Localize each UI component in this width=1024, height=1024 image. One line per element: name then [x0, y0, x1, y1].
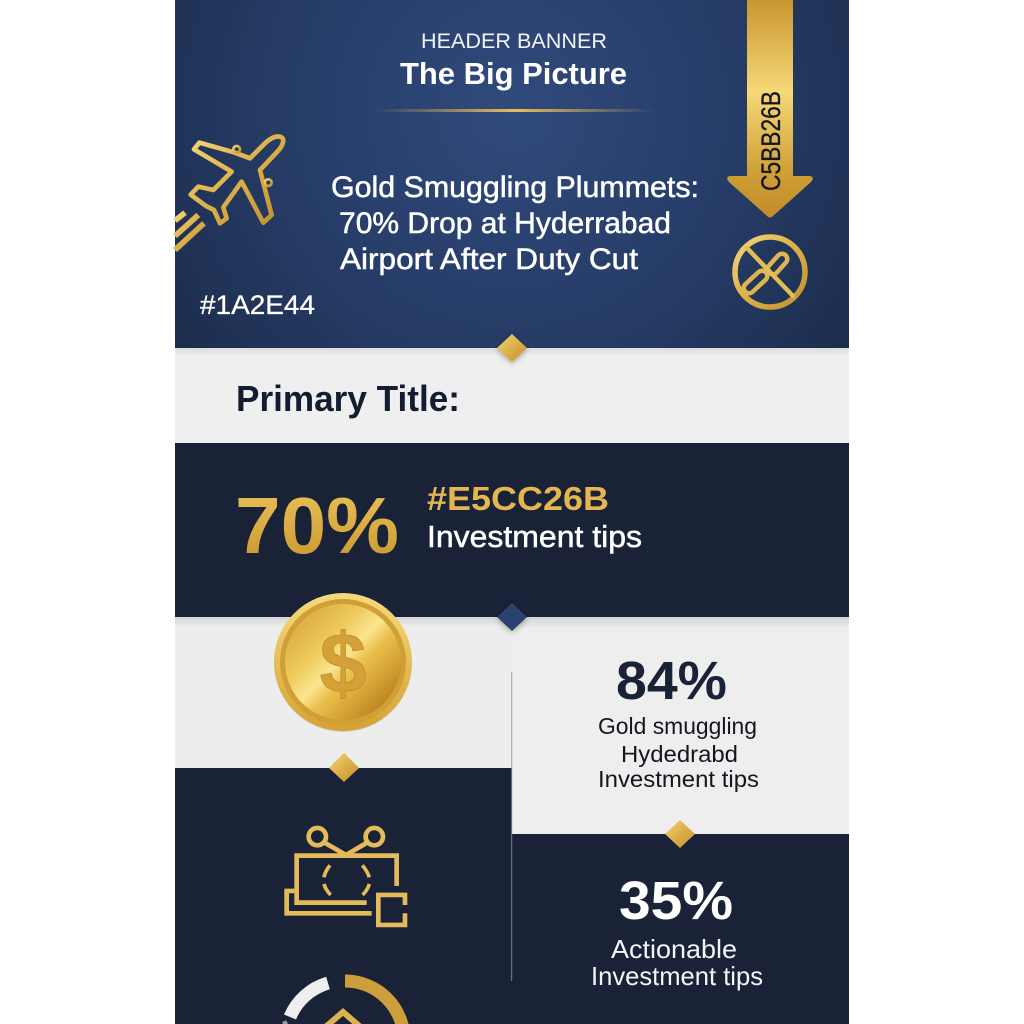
caption line 3: Investment tips — [598, 766, 759, 792]
icon: gold dollar coin — [274, 593, 412, 732]
panel: light left — [175, 617, 512, 768]
headline line 3: Airport After Duty Cut — [340, 243, 638, 276]
arrow: gold down arrow — [727, 0, 813, 218]
icon: money bill with scissors — [287, 828, 405, 925]
icon: airplane — [175, 136, 283, 250]
dollar sign: $ — [320, 616, 366, 710]
panel: 84% statistic — [512, 617, 849, 834]
caption line 2: Hydedrabd — [621, 741, 738, 767]
panel: header banner — [175, 0, 849, 348]
headline line 2: 70% Drop at Hyderrabad — [339, 207, 671, 240]
panel: 35% statistic — [512, 834, 849, 1024]
diamond: header connector — [497, 334, 527, 362]
headline — [331, 171, 699, 276]
caption line 1: Actionable — [611, 934, 737, 964]
header label: HEADER BANNER — [421, 30, 607, 53]
gold rule — [375, 109, 655, 112]
arrow label: C5BB26B — [756, 91, 786, 191]
diamond: left connector — [329, 753, 359, 782]
colour label navy: #1A2E44 — [200, 290, 315, 320]
headline line 1: Gold Smuggling Plummets: — [331, 171, 699, 204]
stat value 84%: 84% — [616, 651, 727, 711]
primary title: Primary Title: — [236, 378, 460, 419]
caption line 2: Investment tips — [591, 961, 763, 991]
panel: navy left — [175, 768, 512, 1024]
colour label gold: #E5CC26B — [427, 480, 609, 517]
diamond: navy connector — [497, 603, 527, 631]
stat caption: Investment tips — [427, 519, 642, 554]
centre divider line — [511, 672, 512, 981]
stat value 35%: 35% — [619, 871, 733, 931]
panel: 70% statistic band — [175, 443, 849, 617]
icon: donut chart with house — [283, 981, 404, 1024]
stat value 70%: 70% — [235, 481, 399, 570]
panel: primary title band — [175, 348, 849, 443]
header title: The Big Picture — [400, 56, 627, 91]
caption line 1: Gold smuggling — [598, 713, 757, 739]
diamond: right connector — [665, 820, 695, 848]
icon: broken chain in prohibition circle — [735, 237, 805, 307]
